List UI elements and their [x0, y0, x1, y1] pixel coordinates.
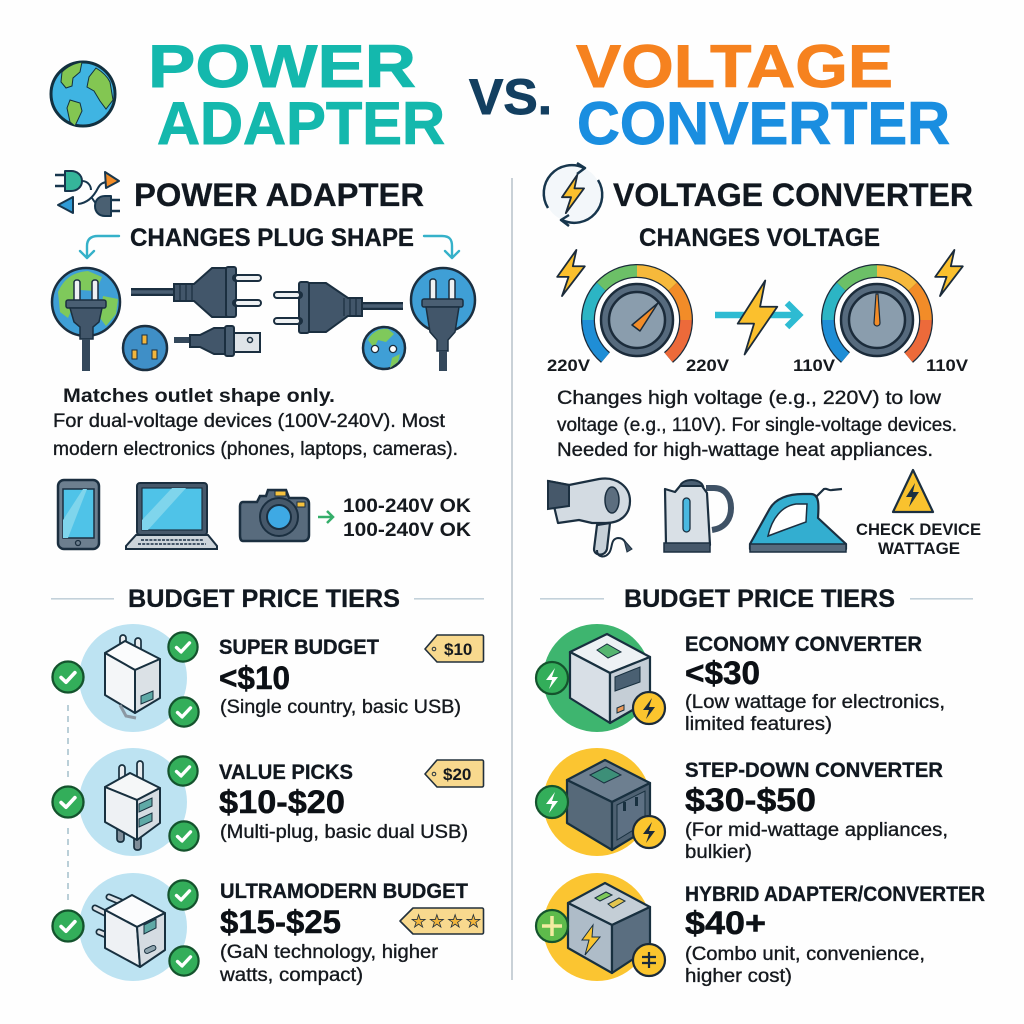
label: 110V left: 110V [793, 356, 836, 375]
label: 220V right: 220V [686, 356, 730, 375]
rating tag stars [400, 908, 484, 934]
icon: plug swap [55, 171, 120, 216]
tier text: HYBRID ADAPTER/CONVERTER [685, 883, 985, 906]
icon: small bolt right [935, 250, 963, 296]
icon: large plug right-facing [131, 267, 258, 317]
icon: globe with plug right [411, 268, 475, 371]
text: check device wattage [856, 520, 981, 558]
tier: super budget [52, 624, 484, 732]
tier text: SUPER BUDGET [219, 636, 379, 659]
tier text [219, 880, 468, 986]
tier text: $40+ [685, 905, 766, 941]
tier: value picks [52, 748, 484, 856]
icon: dark converter cube [543, 748, 651, 856]
text block: adapter description [53, 386, 458, 460]
icon: white adapter [79, 624, 187, 732]
icon: check badges [52, 632, 199, 727]
text block: adapter description: Matches outlet shape only. [63, 386, 335, 407]
tier text: (Combo unit, convenience, [685, 944, 925, 965]
tier text: bulkier) [685, 842, 752, 863]
text block: adapter description: For dual-voltage devices (100V-240V). Most [53, 411, 446, 432]
icon: small bolt left [557, 250, 585, 296]
tier text: VALUE PICKS [219, 761, 353, 784]
tier text: STEP-DOWN CONVERTER [685, 759, 943, 782]
connector: dashed tier line [67, 705, 69, 903]
tier text: $30-$50 [685, 782, 816, 818]
tier text: (For mid-wattage appliances, [685, 820, 948, 841]
column divider [511, 178, 513, 980]
heading: POWER: POWER [148, 33, 416, 100]
heading: voltage converter: VOLTAGE CONVERTER [613, 177, 973, 213]
arrow: right [424, 236, 459, 258]
tier: step-down converter [536, 748, 948, 863]
text: voltage ok labels: 100-240V OK [343, 496, 471, 517]
tier text: (Multi-plug, basic dual USB) [220, 822, 468, 843]
tier text: higher cost) [685, 966, 792, 987]
tier text: limited features) [685, 714, 832, 735]
label: 220V left: 220V [547, 356, 591, 375]
panel: power adapter [51, 171, 484, 986]
tier text: $10-$20 [219, 784, 345, 820]
icon: badges [536, 662, 665, 724]
icon: GaN adapter [79, 873, 187, 981]
heading: VOLTAGE: VOLTAGE [576, 33, 893, 100]
icon: large plug left-facing [277, 282, 403, 333]
subheading: changes plug shape: CHANGES PLUG SHAPE [130, 224, 414, 252]
heading: CONVERTER: CONVERTER [577, 90, 950, 157]
icon: check badges [52, 880, 199, 976]
text block: converter description: Changes high voltage (e.g., 220V) to low [557, 388, 941, 409]
icon: kettle [664, 480, 731, 552]
title banner [51, 33, 950, 157]
icon: phone [58, 480, 99, 549]
icon: hybrid converter cube [543, 873, 651, 981]
text block: converter description [557, 388, 957, 461]
subheading: changes voltage: CHANGES VOLTAGE [639, 224, 880, 252]
tier text: (Single country, basic USB) [220, 697, 461, 718]
arrow: conversion [715, 281, 799, 354]
arrow: left [80, 236, 119, 258]
tier: ultramodern budget [52, 873, 484, 986]
icon: dual usb adapter [79, 748, 187, 856]
gauge: 220V [588, 271, 686, 358]
price tag $20: $20 [443, 765, 471, 784]
gauge: 110V [828, 271, 926, 358]
arrow: green ok arrow [318, 511, 333, 523]
icon: white converter cube [543, 624, 651, 732]
tier: hybrid adapter/converter [536, 873, 985, 987]
tier text: (GaN technology, higher [220, 942, 439, 963]
heading: budget tiers left: BUDGET PRICE TIERS [128, 585, 400, 613]
tier: economy converter [536, 624, 945, 735]
tier text: (Low wattage for electronics, [685, 692, 945, 713]
tier text: ULTRAMODERN BUDGET [220, 880, 468, 903]
icon: laptop [126, 483, 217, 549]
price tag $10: $10 [444, 640, 472, 659]
text block: converter description: voltage (e.g., 110V). For single-voltage devices. [557, 415, 957, 436]
icon: small globe socket [363, 327, 405, 369]
icon: small flat plug [174, 326, 260, 356]
text block: adapter description: modern electronics (phones, laptops, cameras). [53, 439, 458, 460]
icon: earth globe [51, 62, 115, 126]
icon: badges [536, 910, 665, 976]
icon: hair dryer [548, 479, 632, 556]
icon: badges [536, 786, 665, 848]
tier text: ECONOMY CONVERTER [685, 633, 922, 656]
panel: voltage converter [536, 163, 985, 987]
icon: globe with plug left [52, 268, 120, 371]
icon: clothes iron [750, 489, 846, 552]
text: check device wattage: CHECK DEVICE [856, 520, 981, 539]
icon: camera [240, 490, 309, 541]
price tag $20 [425, 760, 484, 787]
tier text: watts, compact) [219, 965, 363, 986]
text: check device wattage: WATTAGE [878, 539, 960, 558]
price tag $10 [425, 635, 484, 662]
tier text [219, 636, 461, 718]
heading: vs.: VS. [469, 69, 552, 125]
heading: ADAPTER: ADAPTER [157, 90, 445, 157]
icon: converter cycle bolt [544, 163, 602, 226]
tier text [685, 759, 948, 863]
icon: warning sign [893, 470, 933, 512]
tier text [685, 883, 985, 987]
rating tag stars: ★★★★ [411, 912, 481, 932]
text: voltage ok labels [343, 496, 471, 541]
icon: check badges [52, 756, 199, 851]
tier text: <$10 [219, 660, 290, 696]
heading: power adapter: POWER ADAPTER [134, 177, 424, 213]
tier text [685, 633, 945, 735]
tier text [219, 761, 468, 843]
tier text: $15-$25 [220, 904, 341, 940]
heading: budget tiers right: BUDGET PRICE TIERS [624, 585, 895, 613]
label: 110V right: 110V [926, 356, 969, 375]
text: voltage ok labels: 100-240V OK [343, 520, 471, 541]
tier text: <$30 [685, 655, 760, 691]
text block: converter description: Needed for high-wattage heat appliances. [557, 440, 933, 461]
icon: socket [123, 326, 167, 370]
